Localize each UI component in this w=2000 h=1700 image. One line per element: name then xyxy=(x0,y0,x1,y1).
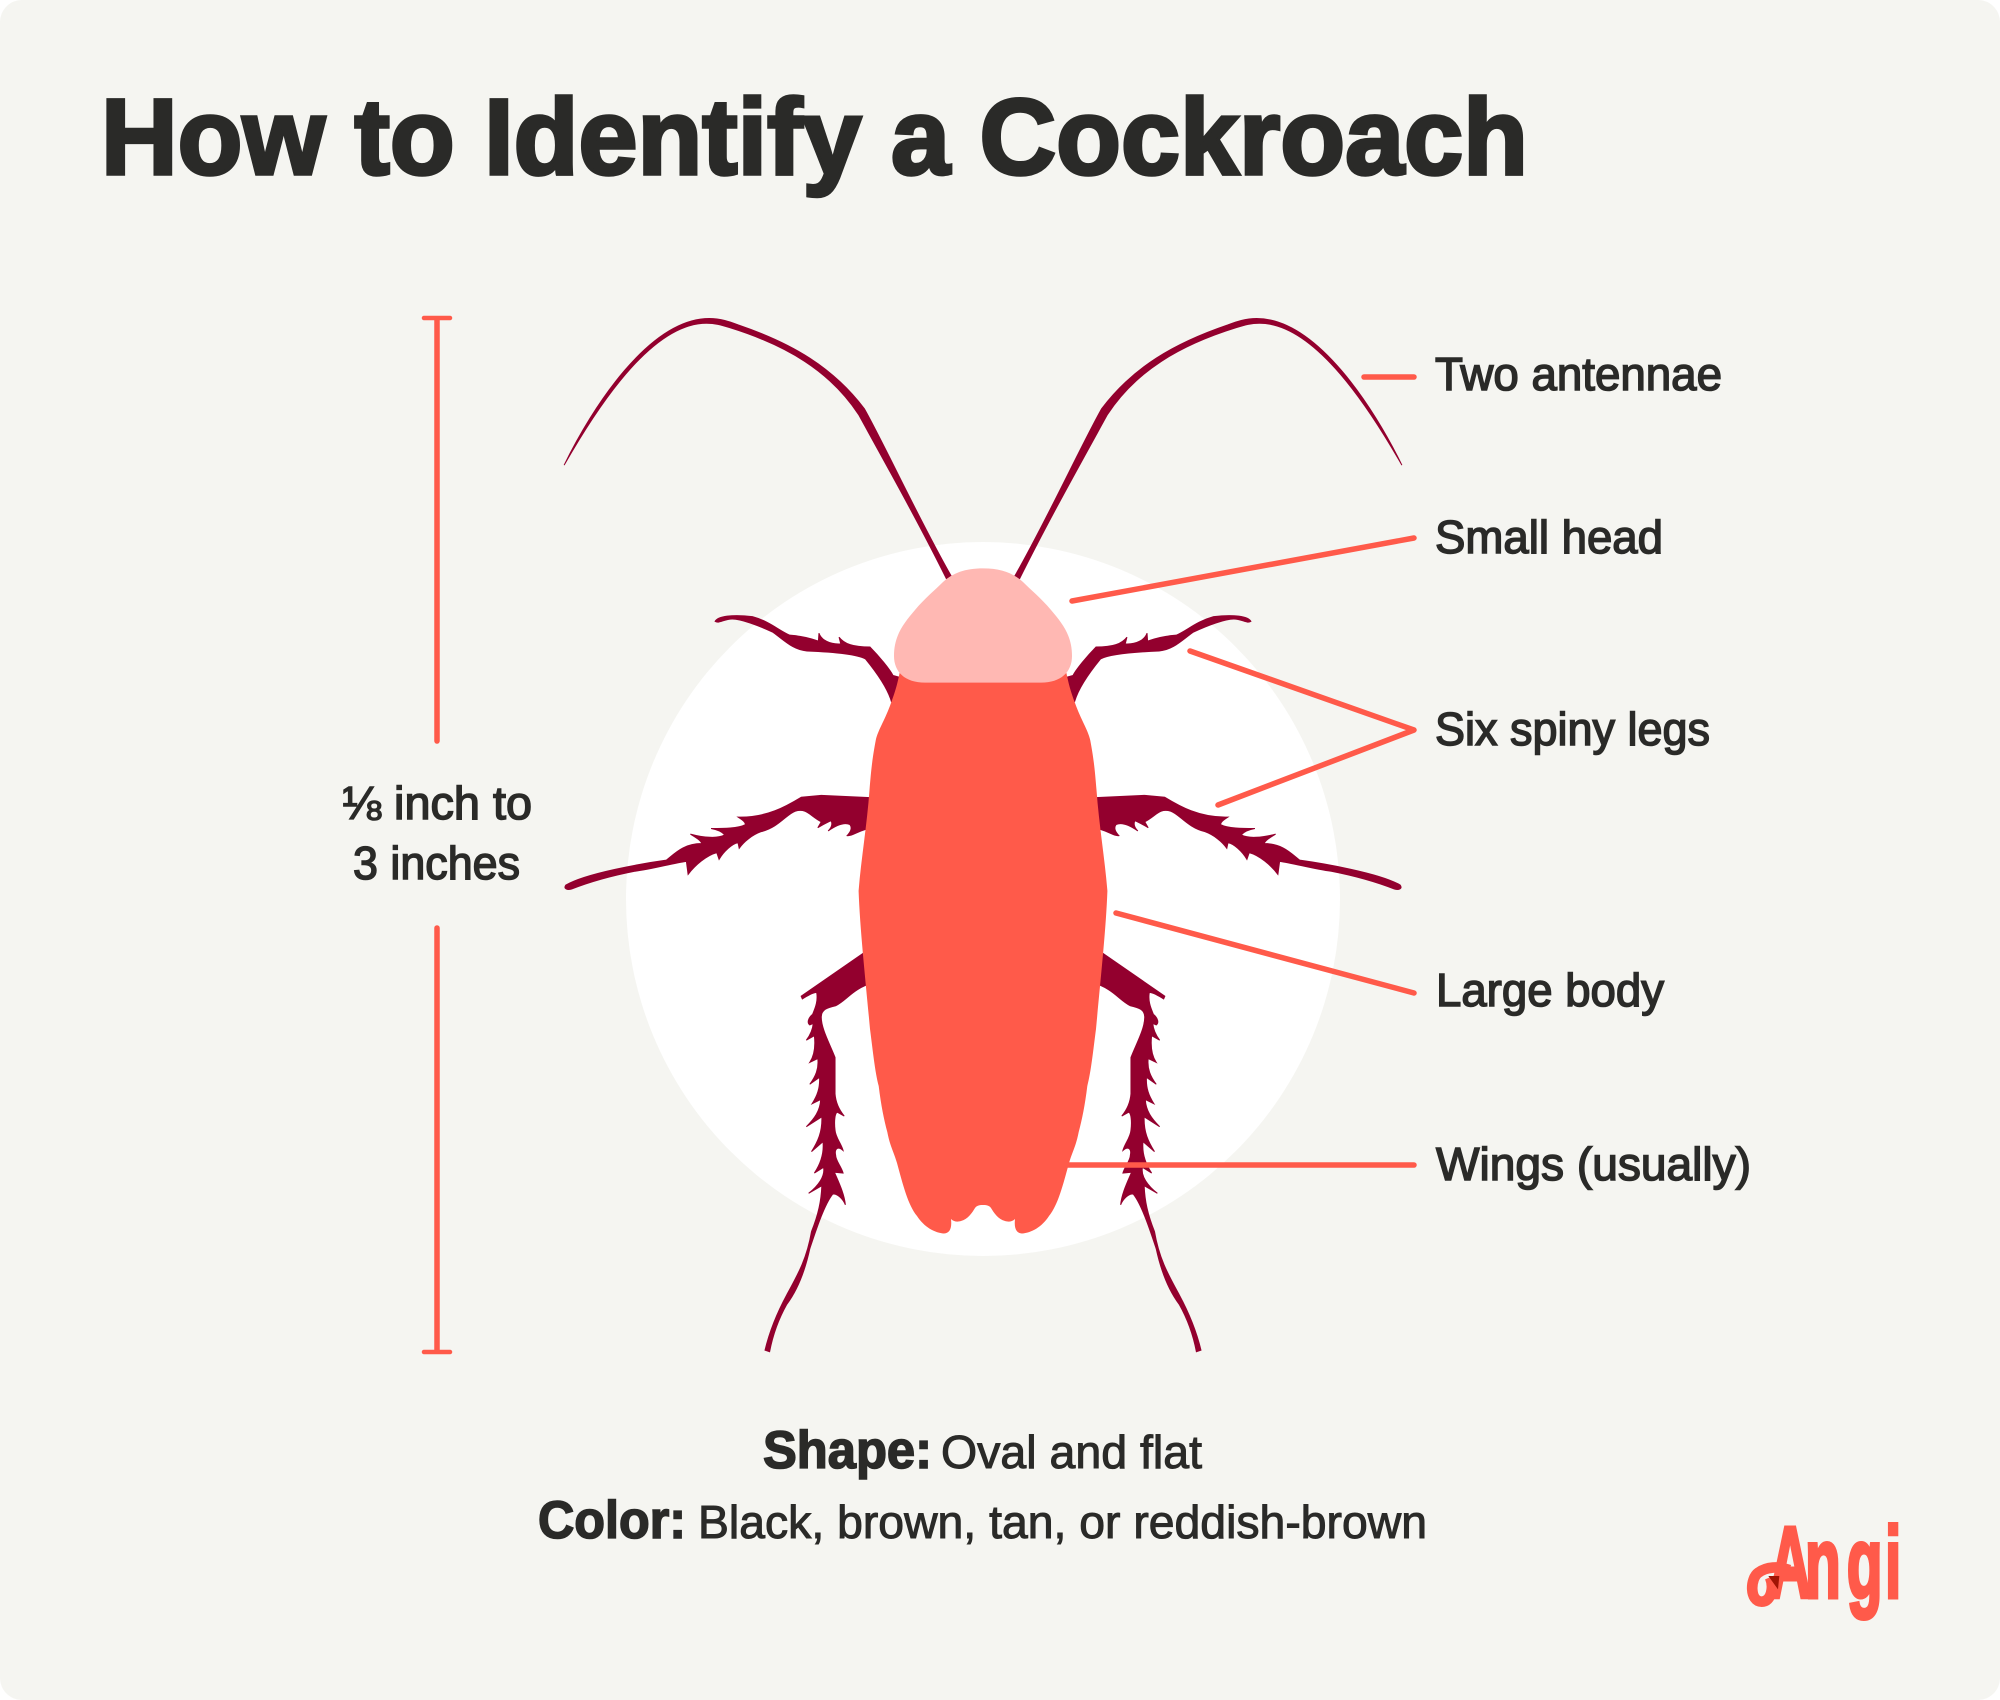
shape description: Oval and flat xyxy=(941,1426,1202,1478)
title: How to Identify a Cockroach xyxy=(101,76,1528,197)
left hind leg xyxy=(765,946,873,1352)
callout: small head xyxy=(1072,511,1663,601)
color description: Black, brown, tan, or reddish-brown xyxy=(698,1496,1427,1548)
left antenna xyxy=(564,318,952,579)
shape description: Shape: xyxy=(763,1421,932,1480)
right middle leg xyxy=(1093,795,1401,889)
callout: large body: Large body xyxy=(1436,964,1664,1016)
callout: wings: Wings (usually) xyxy=(1436,1138,1751,1190)
right hind leg xyxy=(1093,946,1201,1352)
size label: 3 inches xyxy=(353,837,520,889)
right antenna xyxy=(1014,318,1402,579)
cockroach illustration xyxy=(564,318,1402,1352)
size label: ⅛ inch to xyxy=(342,777,532,829)
size scale bar xyxy=(424,318,450,1352)
white circle backdrop xyxy=(626,542,1340,1256)
callout: two antennae: Two antennae xyxy=(1435,348,1722,400)
color description: Color: xyxy=(538,1491,686,1550)
left front leg xyxy=(715,616,907,701)
right front leg xyxy=(1059,616,1251,701)
logo: Angi: Angi xyxy=(1769,1507,1901,1620)
body and wings xyxy=(859,671,1107,1234)
shape description xyxy=(763,1421,1202,1480)
size label xyxy=(342,777,532,889)
callout: six spiny legs xyxy=(1190,651,1710,805)
left middle leg xyxy=(565,795,873,889)
head xyxy=(894,568,1072,683)
callout: small head: Small head xyxy=(1435,511,1663,563)
callout: six spiny legs: Six spiny legs xyxy=(1435,703,1710,755)
callout: large body xyxy=(1116,913,1664,1016)
